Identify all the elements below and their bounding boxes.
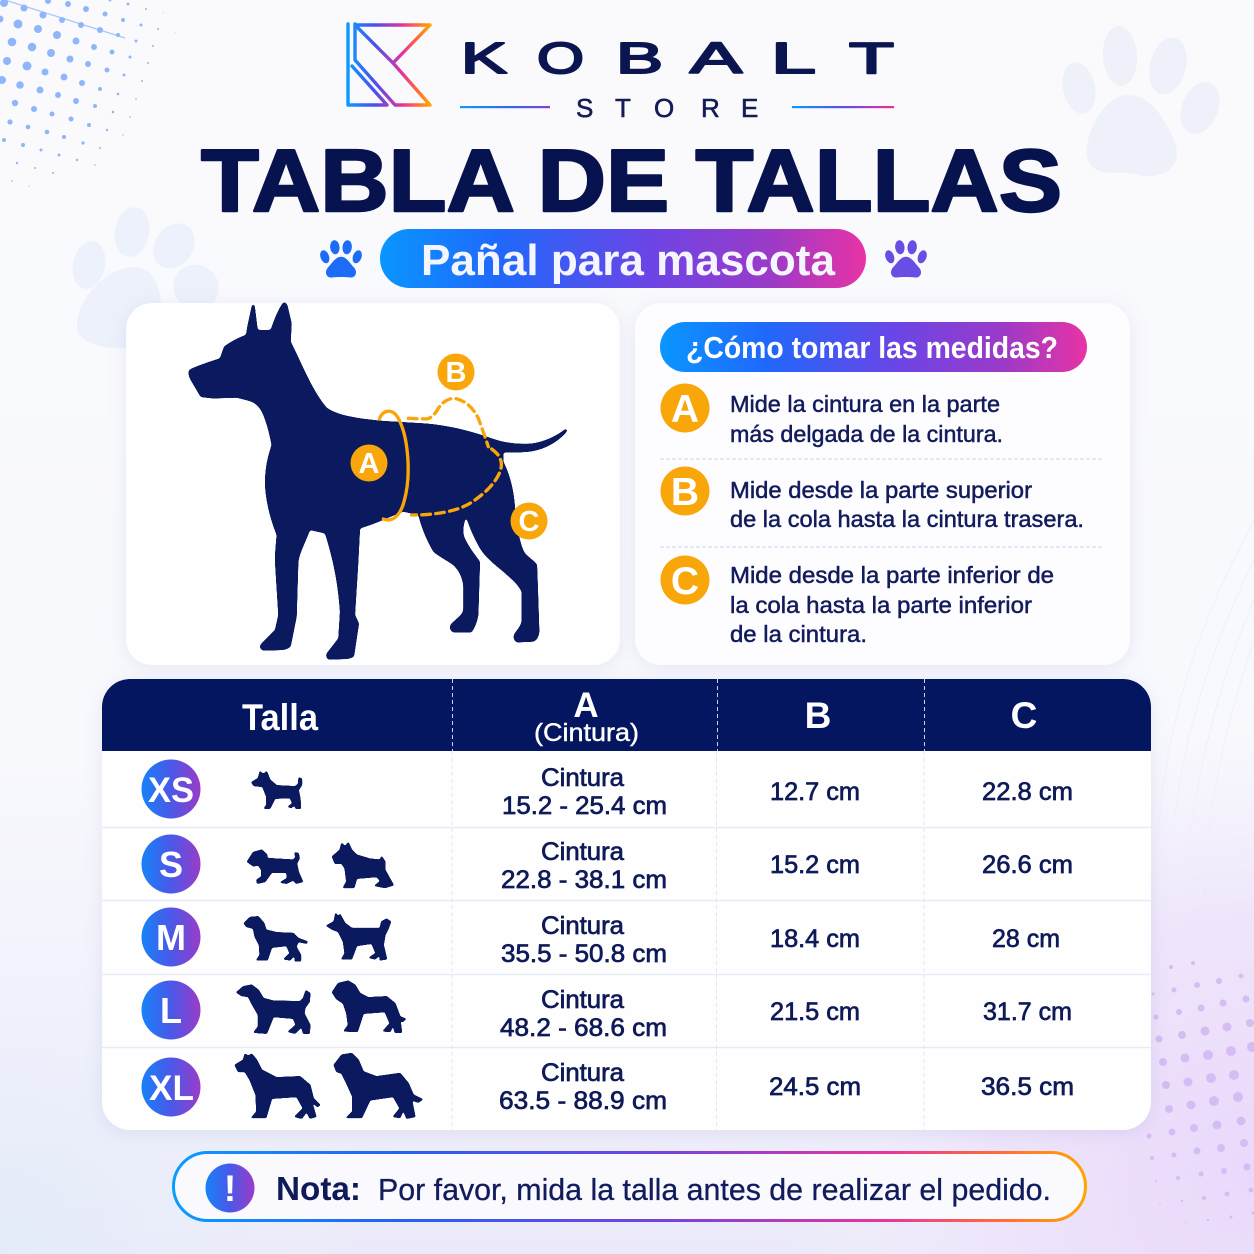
row M: 35.5 - 50.8 cm	[501, 940, 667, 968]
note callout: Nota:	[276, 1170, 361, 1207]
size table	[102, 679, 1151, 1130]
wordmark: KOBALT: O	[537, 34, 584, 83]
step C: de la cintura.	[730, 621, 867, 647]
halftone dots: top left	[0, 0, 176, 187]
row XS: 22.8 cm	[982, 778, 1073, 806]
row L: Cintura	[541, 986, 624, 1014]
table header: B	[805, 695, 831, 736]
marker B: B	[446, 357, 466, 389]
row S: S	[159, 844, 183, 885]
dog silhouette	[189, 302, 568, 660]
row L: 31.7 cm	[983, 998, 1072, 1026]
icon: dogs M	[244, 913, 391, 961]
row XS	[142, 760, 1073, 820]
note callout: Por favor, mida la talla antes de realizar el pedido.	[378, 1172, 1051, 1207]
row XL: 63.5 - 88.9 cm	[499, 1087, 667, 1115]
step C: Mide desde la parte inferior de	[730, 562, 1054, 588]
halftone dots: bottom right	[1146, 961, 1254, 1224]
wordmark: KOBALT: L	[771, 34, 816, 83]
icon: dogs XL	[235, 1053, 422, 1118]
row M: Cintura	[541, 912, 624, 940]
step B: B	[671, 471, 699, 514]
row L: L	[160, 990, 182, 1031]
row XS: 15.2 - 25.4 cm	[502, 792, 667, 820]
row L	[142, 980, 1072, 1042]
icon: paw left	[318, 240, 364, 278]
row XL: 24.5 cm	[769, 1073, 861, 1101]
row L: 21.5 cm	[770, 998, 860, 1026]
row S	[142, 834, 1073, 894]
row XS: XS	[148, 771, 194, 810]
icon: dog XS	[252, 772, 302, 808]
row XL	[142, 1053, 1074, 1118]
table header: Talla	[242, 697, 318, 738]
step C	[660, 556, 1054, 647]
row S: Cintura	[541, 838, 624, 866]
marker B	[438, 354, 474, 390]
step A	[660, 384, 1003, 447]
row M: 18.4 cm	[770, 925, 860, 953]
table header	[102, 679, 1151, 751]
logo mark	[348, 24, 430, 105]
row S: 22.8 - 38.1 cm	[501, 866, 667, 894]
panel: dog diagram	[126, 302, 620, 665]
marker A: A	[359, 448, 380, 480]
step A: A	[671, 388, 699, 431]
icon: dogs S	[247, 843, 393, 888]
step A: más delgada de la cintura.	[730, 421, 1003, 447]
step C: la cola hasta la parte inferior	[730, 592, 1032, 618]
icon: paw right	[883, 240, 929, 278]
row M	[142, 908, 1060, 968]
row XL: XL	[149, 1069, 194, 1108]
wordmark: KOBALT: A	[690, 34, 743, 83]
row S: 26.6 cm	[982, 851, 1073, 879]
watermark paw: left	[68, 204, 227, 348]
table header: A	[573, 686, 599, 725]
note callout	[174, 1152, 1086, 1220]
icon: exclamation	[206, 1164, 254, 1212]
subtitle pill: Pañal para mascota	[421, 236, 836, 285]
row S: 15.2 cm	[770, 851, 860, 879]
step C: C	[671, 560, 699, 603]
heading pill	[660, 322, 1087, 372]
wordmark: KOBALT: K	[461, 34, 507, 83]
row XL: 36.5 cm	[981, 1073, 1074, 1101]
row XL: Cintura	[541, 1059, 624, 1087]
wordmark: KOBALT: B	[616, 34, 663, 83]
watermark paw: top right	[1058, 25, 1227, 176]
panel: how to measure	[635, 303, 1130, 665]
measure lines	[379, 398, 501, 520]
step B: Mide desde la parte superior	[730, 477, 1032, 503]
table header: (Cintura)	[534, 719, 639, 747]
icon: exclamation: !	[224, 1168, 236, 1209]
title: TABLA DE TALLAS	[201, 131, 1062, 230]
row M: M	[156, 917, 186, 958]
wordmark: KOBALT	[461, 34, 894, 83]
marker A	[350, 444, 388, 482]
table header: C	[1011, 695, 1037, 736]
heading pill: ¿Cómo tomar las medidas?	[686, 330, 1058, 365]
step B: de la cola hasta la cintura trasera.	[730, 506, 1084, 532]
row XS: 12.7 cm	[770, 778, 860, 806]
row L: 48.2 - 68.6 cm	[500, 1014, 667, 1042]
marker C	[510, 502, 548, 540]
step A: Mide la cintura en la parte	[730, 391, 1000, 417]
wordmark: STORE: STORE	[576, 93, 758, 123]
marker C: C	[519, 506, 540, 538]
logo	[348, 24, 894, 123]
row M: 28 cm	[992, 925, 1060, 953]
step B	[660, 466, 1084, 532]
icon: dogs L	[237, 981, 406, 1033]
wordmark: KOBALT: T	[849, 34, 894, 83]
row XS: Cintura	[541, 764, 624, 792]
